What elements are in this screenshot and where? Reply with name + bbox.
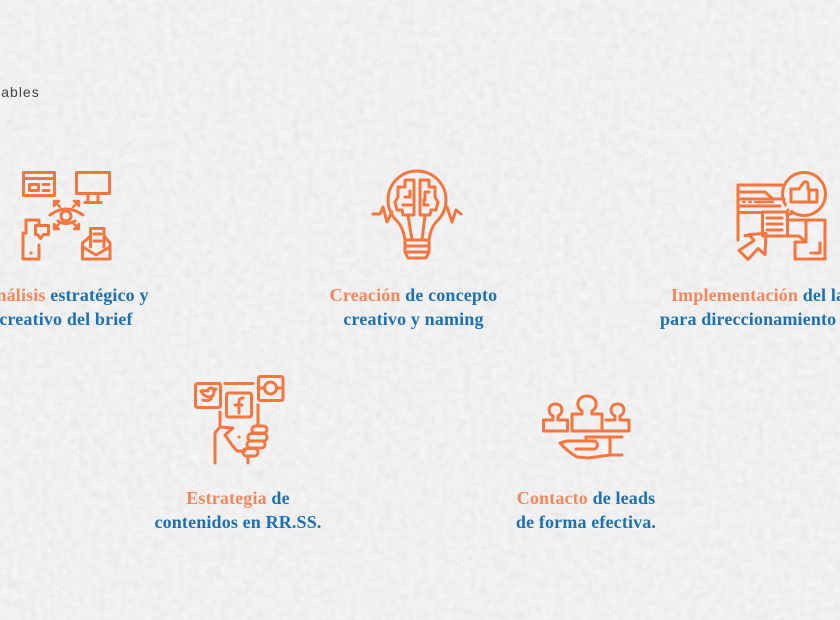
caption: contacto: Contacto de leads	[517, 488, 655, 508]
caption: creación: creativo y naming	[343, 309, 484, 329]
caption: creación: Creación de concepto	[330, 285, 497, 305]
icon: hand holding social networks	[196, 376, 283, 463]
caption: análisis	[0, 285, 149, 329]
icon: analysis eye and devices	[23, 172, 110, 259]
caption: contacto: de forma efectiva.	[516, 512, 656, 532]
caption: creación	[330, 285, 497, 329]
caption: contacto	[516, 488, 656, 532]
caption: estrategia: contenidos en RR.SS.	[154, 512, 322, 532]
caption: estrategia: Estrategia de	[186, 488, 290, 508]
icon: landing page with like	[738, 172, 826, 260]
icon: hand holding contacts	[544, 396, 629, 458]
icon: light bulb with brain	[373, 171, 461, 258]
caption: estrategia	[154, 488, 322, 532]
caption: análisis: creativo del brief	[0, 309, 133, 329]
caption: implementación	[660, 285, 840, 329]
